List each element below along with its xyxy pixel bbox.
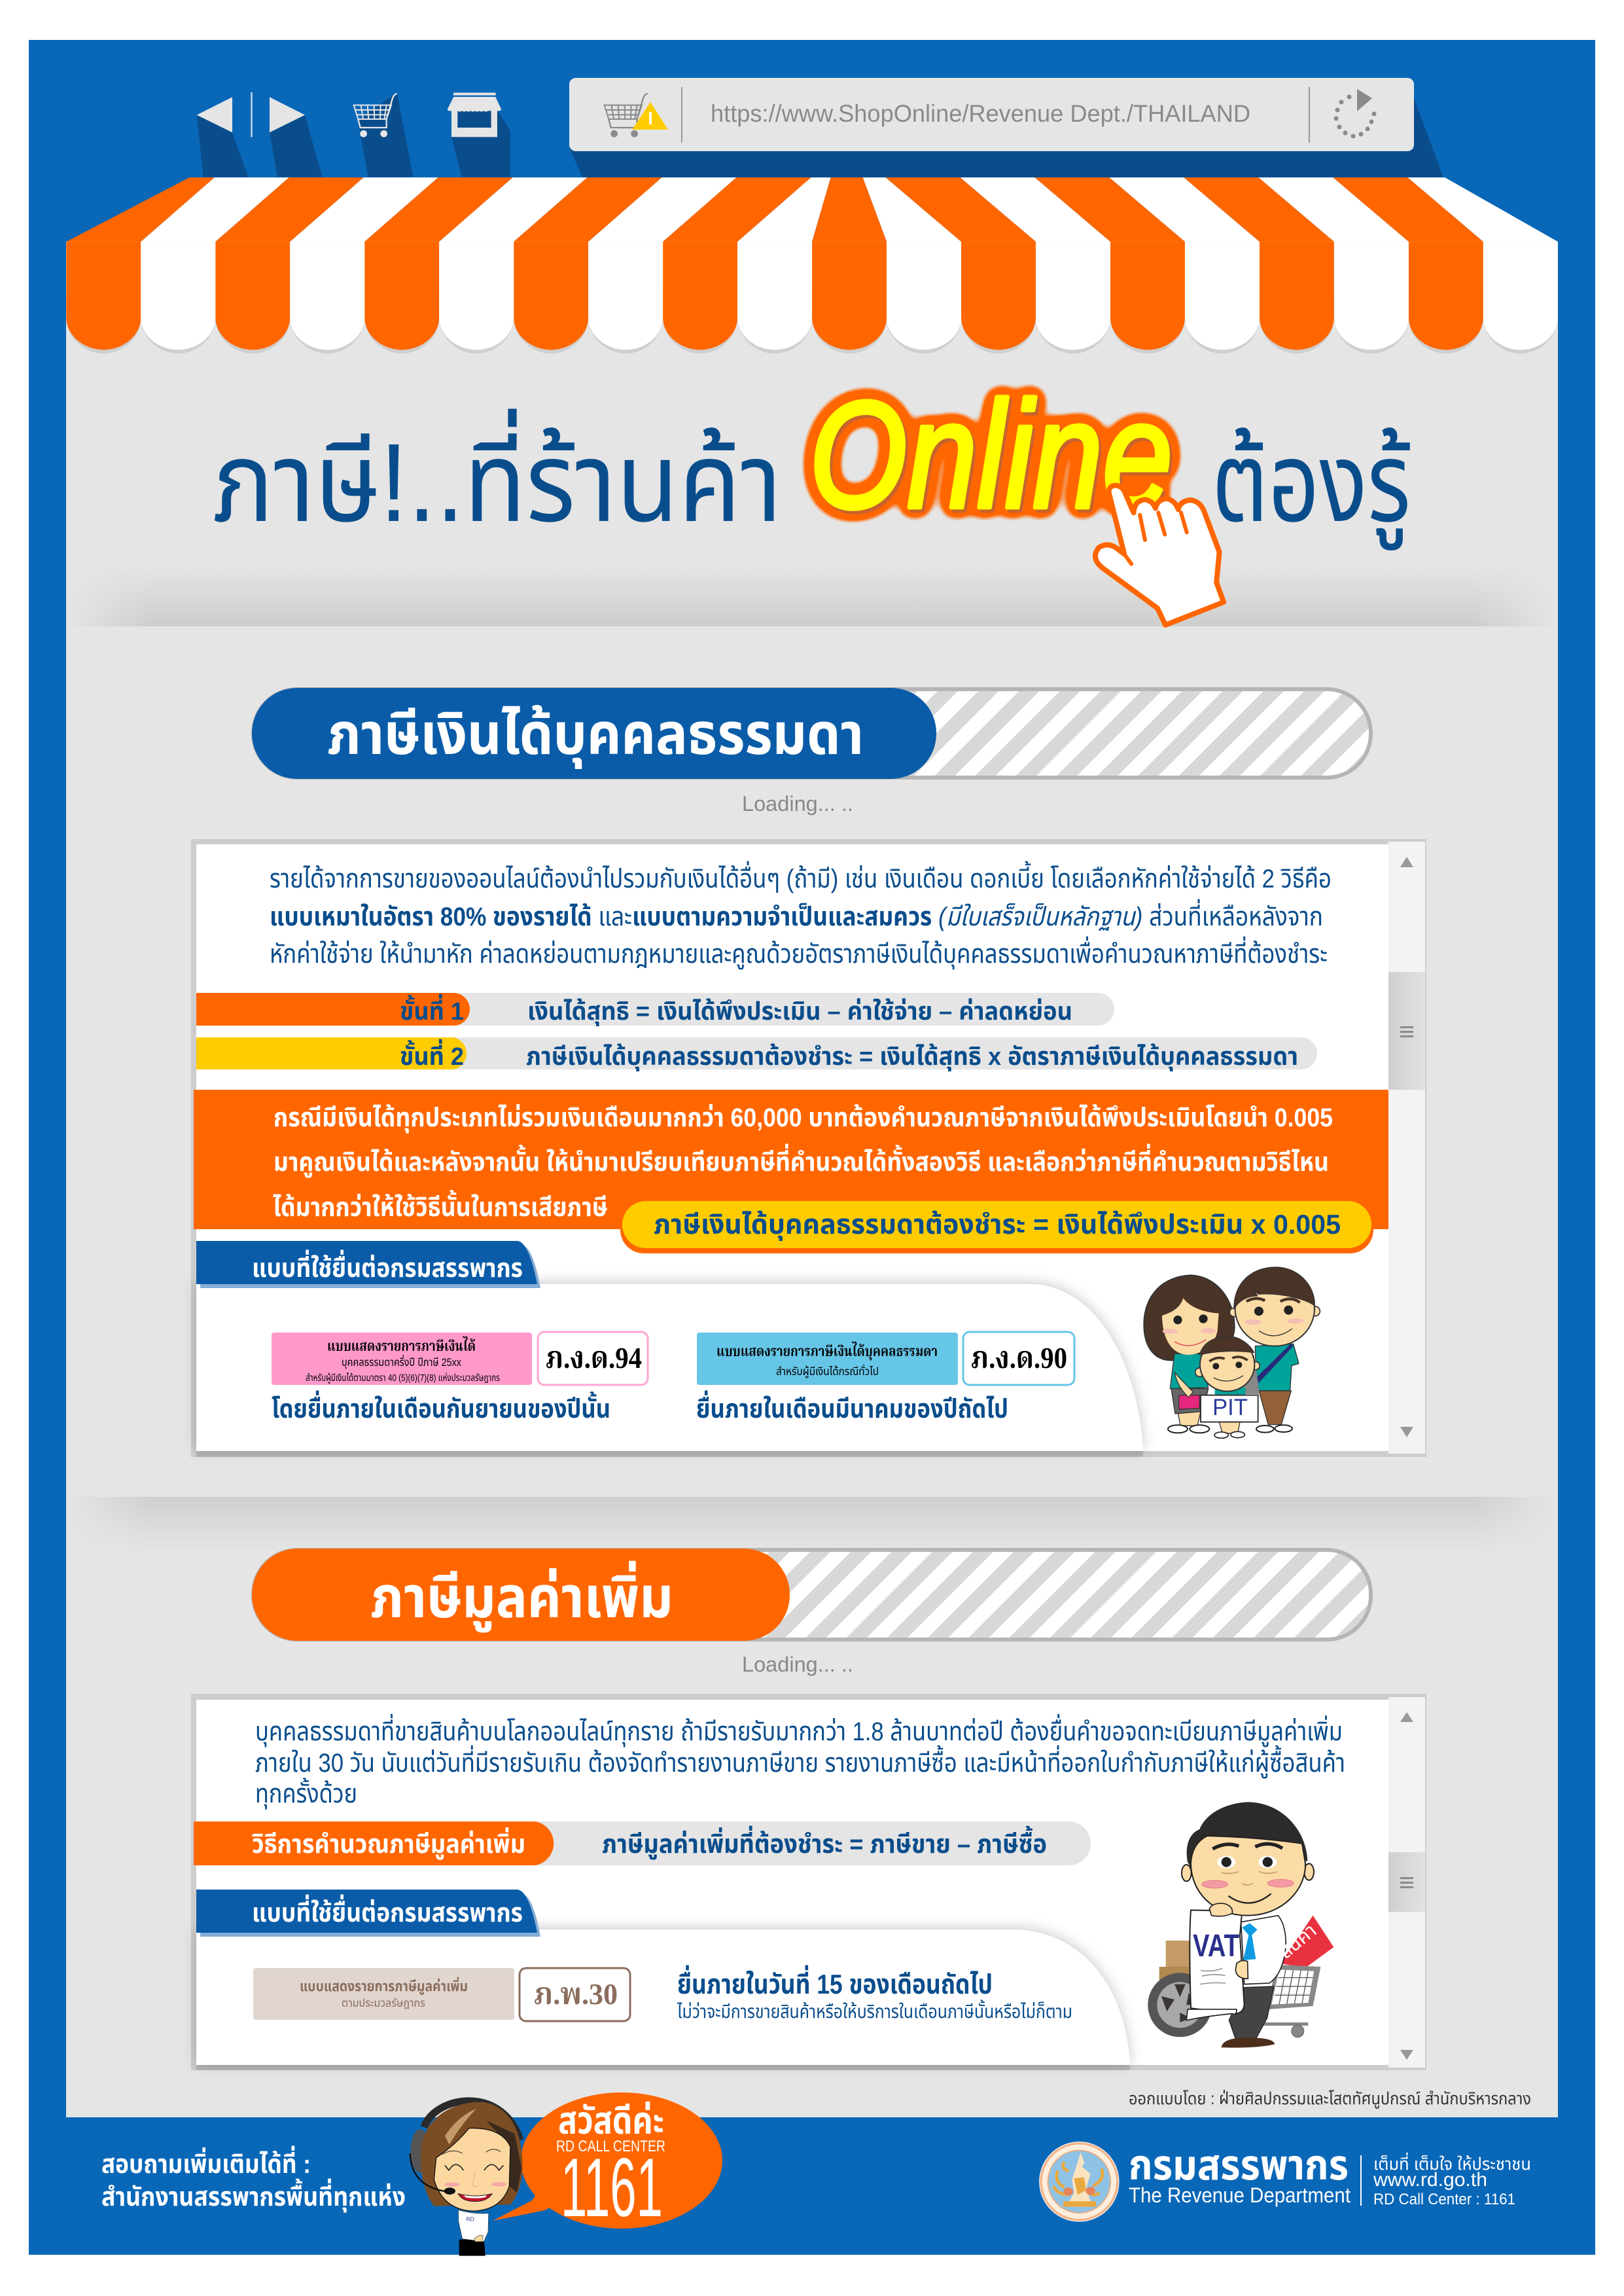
awning <box>66 177 1558 353</box>
title <box>213 370 1411 625</box>
loading label: Loading... .. <box>742 792 853 816</box>
tab: forms: แบบที่ใช้ยื่นต่อกรมสรรพากร <box>252 1894 523 1928</box>
icon: shopping cart <box>354 93 414 177</box>
heading text: ภาษีเงินได้บุคคลธรรมดา <box>327 702 864 769</box>
goods tag label: สินค้า <box>1275 1920 1321 1963</box>
intro paragraph: แบบเหมาในอัตรา 80% ของรายได้ และแบบตามความจำเป็นและสมควร (มีใบเสร็จเป็นหลักฐาน) ส่วนที่เหลือหลังจาก <box>270 899 1323 931</box>
intro paragraph <box>270 861 1332 969</box>
scrollbar <box>1388 842 1425 1454</box>
form: PP 30: ภ.พ.30 <box>534 1977 618 2011</box>
tab: forms <box>196 1241 540 1288</box>
child <box>1199 1355 1260 1394</box>
title: Online word: Online <box>809 370 1173 540</box>
form: PND 94: ภ.ง.ด.94 <box>546 1341 642 1374</box>
illustration: family with PIT sign <box>1144 1267 1320 1438</box>
intro paragraph: รายได้จากการขายของออนไลน์ต้องนำไปรวมกับเงินได้อื่นๆ (ถ้ามี) เช่น เงินเดือน ดอกเบี้ย โดยเลือกหักค่าใช้จ่ายได้ 2 วิธีคือ <box>270 861 1332 893</box>
title: left words: ภาษี!..ที่ร้านค้า <box>213 408 782 545</box>
form: PP 30: ยื่นภายในวันที่ 15 ของเดือนถัดไป <box>677 1965 993 2000</box>
callout: high income rule: ได้มากกว่าให้ใช้วิธีนั้นในการเสียภาษี <box>273 1189 608 1222</box>
address bar <box>569 78 1443 177</box>
logo: Revenue Department: The Revenue Department <box>1129 2183 1350 2207</box>
form: PP 30: ไม่ว่าจะมีการขายสินค้าหรือให้บริการในเดือนภาษีนั้นหรือไม่ก็ตาม <box>677 2000 1072 2022</box>
footer contact text: สำนักงานสรรพากรพื้นที่ทุกแห่ง <box>101 2178 406 2213</box>
form: PND 94: สำหรับผู้มีเงินได้ตามมาตรา 40 (5)(6)(7)(8) แห่งประมวลรัษฎากร <box>306 1372 500 1384</box>
section shadow band <box>66 1497 1558 1551</box>
form: PND 94 <box>272 1332 648 1424</box>
storefront panel <box>66 242 1558 2117</box>
heading pill <box>252 688 936 779</box>
icon: department seal <box>1040 2142 1119 2221</box>
VAT formula: ภาษีมูลค่าเพิ่มที่ต้องชำระ = ภาษีขาย – ภาษีซื้อ <box>602 1825 1047 1860</box>
form: PND 90: แบบแสดงรายการภาษีเงินได้บุคคลธรรมดา <box>716 1342 938 1361</box>
browser toolbar <box>197 78 1443 177</box>
VAT label: VAT <box>1193 1929 1239 1964</box>
speech bubble: call center <box>493 2092 722 2234</box>
step 2 <box>196 1037 1317 1071</box>
logo: Revenue Department: กรมสรรพากร <box>1129 2142 1349 2189</box>
icon: reload spinner <box>1333 89 1377 139</box>
title: right words: ต้องรู้ <box>1212 421 1411 550</box>
logo: Revenue Department <box>1040 2142 1531 2221</box>
step 1 <box>196 993 1114 1026</box>
icon: back and forward arrows <box>197 92 323 177</box>
panel: personal income tax <box>191 839 1426 1457</box>
logo: Revenue Department: www.rd.go.th <box>1373 2169 1487 2191</box>
icon: cart with warning <box>605 94 668 137</box>
logo: Revenue Department: เต็มที่ เต็มใจ ให้ประชาชน <box>1373 2152 1531 2174</box>
VAT paragraph: ภายใน 30 วัน นับแต่วันที่มีรายรับเกิน ต้องจัดทำรายงานภาษีขาย รายงานภาษีซื้อ และมีหน้าที่ออกใบกำกับภาษีให้แก่ผู้ซื้อสินค้า <box>255 1745 1345 1778</box>
curved white sheet <box>196 1284 1143 1451</box>
form: PND 90 <box>696 1332 1074 1424</box>
tab: forms: แบบที่ใช้ยื่นต่อกรมสรรพากร <box>252 1249 523 1283</box>
step 1: เงินได้สุทธิ = เงินได้พึงประเมิน – ค่าใช้จ่าย – ค่าลดหย่อน <box>527 998 1072 1026</box>
callout: high income rule: มาคูณเงินได้และหลังจากนั้น ให้นำมาเปรียบเทียบภาษีที่คำนวณได้ทั้งสองวิธี และเลือกว่าภาษีที่คำนวณตามวิธีไหน <box>274 1143 1329 1178</box>
illustration: call center agent <box>410 2101 522 2256</box>
heading pill <box>252 1549 790 1641</box>
VAT formula <box>194 1821 1091 1865</box>
form: PP 30: ตามประมวลรัษฎากร <box>342 1997 425 2009</box>
footer contact text <box>101 2145 406 2213</box>
form: PP 30: แบบแสดงรายการภาษีมูลค่าเพิ่ม <box>300 1977 468 1995</box>
formula pill: ภาษีเงินได้บุคคลธรรมดาต้องชำระ = เงินได้พึงประเมิน x 0.005 <box>654 1209 1341 1241</box>
VAT paragraph <box>255 1713 1345 1809</box>
url text: https://www.ShopOnline/Revenue Dept./THAILAND <box>711 100 1250 127</box>
father <box>1255 1344 1299 1391</box>
illustration: VAT seller <box>1148 1802 1333 2048</box>
curved white sheet <box>196 1929 1130 2065</box>
loading label: Loading... .. <box>742 1653 853 1676</box>
scrollbar <box>1388 1697 1425 2068</box>
intro paragraph: หักค่าใช้จ่าย ให้นำมาหัก ค่าลดหย่อนตามกฎหมายและคูณด้วยอัตราภาษีเงินได้บุคคลธรรมดาเพื่อคำนวณหาภาษีที่ต้องชำระ <box>270 936 1328 969</box>
callout: high income rule: กรณีมีเงินได้ทุกประเภทไม่รวมเงินเดือนมากกว่า 60,000 บาทต้องคำนวณภาษีจากเงินได้พึงประเมินโดยนำ 0.005 <box>274 1103 1333 1134</box>
panel: VAT <box>191 1694 1426 2070</box>
form: PND 90: สำหรับผู้มีเงินได้กรณีทั่วไป <box>776 1364 879 1379</box>
form: PND 94: แบบแสดงรายการภาษีเงินได้ <box>327 1336 476 1354</box>
header shadow band <box>66 565 1558 626</box>
tab: forms <box>196 1890 540 1937</box>
form: PND 90: ยื่นภายในเดือนมีนาคมของปีถัดไป <box>696 1390 1008 1424</box>
PIT label: PIT <box>1212 1395 1248 1420</box>
form: PND 90: ภ.ง.ด.90 <box>971 1341 1067 1374</box>
step 2: ขั้นที่ 2 <box>400 1039 464 1071</box>
step 1: ขั้นที่ 1 <box>400 994 464 1026</box>
illustration: call center agent: RD <box>467 2216 474 2222</box>
form: PND 94: บุคคลธรรมดาครึ่งปี ปีภาษี 25xx <box>342 1354 461 1369</box>
section bar: VAT <box>252 1549 1371 1641</box>
step 2: ภาษีเงินได้บุคคลธรรมดาต้องชำระ = เงินได้สุทธิ x อัตราภาษีเงินได้บุคคลธรรมดา <box>526 1043 1298 1071</box>
VAT paragraph: ทุกครั้งด้วย <box>255 1777 357 1809</box>
VAT paragraph: บุคคลธรรมดาที่ขายสินค้าบนโลกออนไลน์ทุกราย ถ้ามีรายรับมากกว่า 1.8 ล้านบาทต่อปี ต้องยื่นคำขอจดทะเบียนภาษีมูลค่าเพิ่ม <box>255 1713 1343 1747</box>
speech bubble: call center: RD CALL CENTER <box>556 2138 665 2155</box>
VAT formula: วิธีการคำนวณภาษีมูลค่าเพิ่ม <box>252 1827 525 1860</box>
form: PND 94: โดยยื่นภายในเดือนกันยายนของปีนั้น <box>272 1390 610 1424</box>
mother <box>1144 1275 1235 1360</box>
logo: Revenue Department: RD Call Center : 1161 <box>1373 2191 1515 2208</box>
form: PP 30 <box>253 1965 1072 2022</box>
speech bubble: call center: 1161 <box>561 2141 663 2234</box>
formula pill <box>620 1201 1373 1253</box>
speech bubble: call center: สวัสดีค่ะ <box>558 2100 664 2142</box>
section bar: personal income tax <box>252 688 1371 779</box>
design credit: ออกแบบโดย : ฝ่ายศิลปกรรมและโสตทัศนูปกรณ์ สำนักบริหารกลาง <box>1129 2089 1531 2109</box>
icon: pointing hand <box>1095 486 1224 625</box>
footer contact text: สอบถามเพิ่มเติมได้ที่ : <box>101 2145 311 2179</box>
icon: store front <box>448 93 510 177</box>
callout: high income rule <box>194 1090 1388 1229</box>
heading text: ภาษีมูลค่าเพิ่ม <box>370 1560 673 1633</box>
